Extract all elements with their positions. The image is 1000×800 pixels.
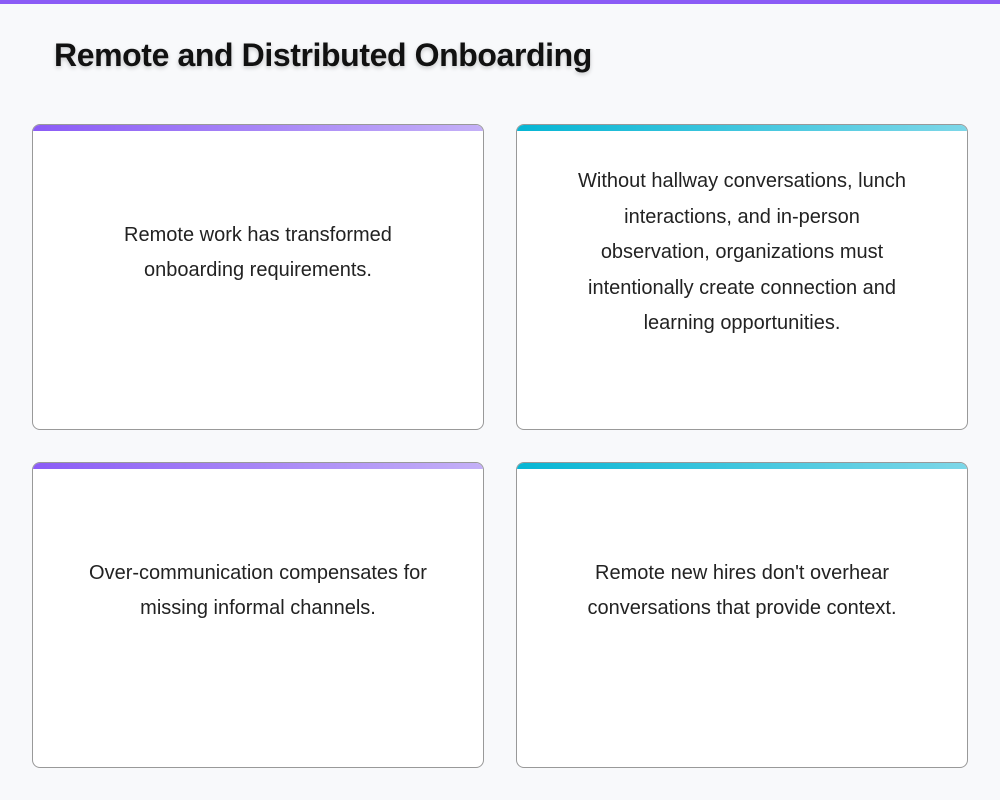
panel: overhear conversations [516, 462, 968, 768]
title: Remote and Distributed Onboarding [54, 37, 592, 73]
panel: transformed requirements [32, 124, 484, 430]
panel: overhear conversations: Remote new hires don't overhear conversations that provide context. [587, 562, 897, 619]
panel: transformed requirements: Remote work has transformed onboarding requirements. [124, 224, 392, 281]
panel: intentional connection [516, 124, 968, 430]
panel: intentional connection: Without hallway conversations, lunch interactions, and in-person observation, organizations must intentionally create connection and learning opportunities. [578, 170, 906, 334]
panel: over-communication: Over-communication compensates for missing informal channels. [89, 562, 427, 619]
panel: over-communication [32, 462, 484, 768]
